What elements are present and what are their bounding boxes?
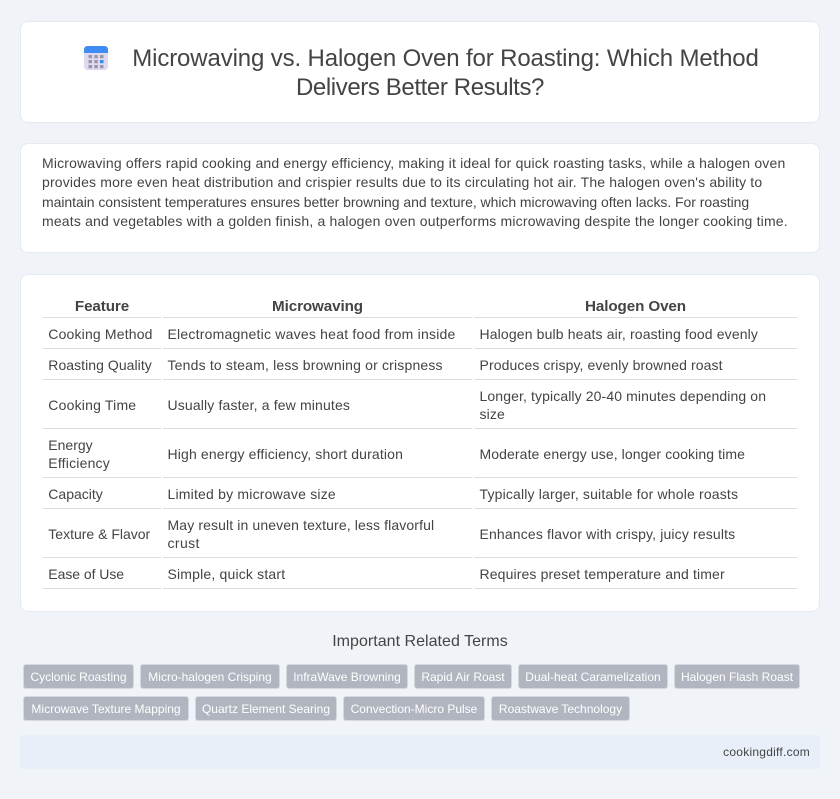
row: Energy Efficiency: High energy efficiency, short duration: [168, 446, 403, 462]
row: Roasting Quality: [43, 348, 797, 373]
row: Texture & Flavor: Enhances flavor with crispy, juicy results: [480, 526, 735, 542]
tag: Quartz Element Searing: [202, 702, 330, 716]
row: Capacity: Capacity: [48, 486, 103, 502]
panel: summary paragraph: [20, 143, 820, 253]
row: Cooking Method: Cooking Method: [48, 326, 153, 342]
row: Capacity: Limited by microwave size: [168, 486, 336, 502]
row: Cooking Time: size: [480, 406, 505, 422]
tag: Cyclonic Roasting: [30, 670, 127, 684]
row: Texture & Flavor: [43, 508, 797, 551]
row: Cooking Method: Electromagnetic waves heat food from inside: [168, 326, 456, 342]
row: Energy Efficiency: Efficiency: [48, 455, 110, 471]
table header: [75, 298, 686, 315]
row: Texture & Flavor: Texture & Flavor: [48, 526, 150, 542]
row: Cooking Time: Usually faster, a few minutes: [168, 397, 350, 413]
tag: Dual-heat Caramelization: [525, 670, 661, 684]
tag: Halogen Flash Roast: [681, 670, 793, 684]
table header: Halogen Oven: [585, 298, 686, 315]
footer source text: cookingdiff.com: [723, 745, 810, 759]
row: Cooking Method: Halogen bulb heats air, roasting food evenly: [480, 326, 758, 342]
tag: [674, 664, 800, 689]
row: Ease of Use: Simple, quick start: [168, 566, 285, 582]
row: Roasting Quality: Tends to steam, less browning or crispness: [168, 357, 443, 373]
tag: [23, 664, 134, 689]
text block: summary: Microwaving offers rapid cooking and energy efficiency, making it ideal for quick roasting tasks, while a halogen oven: [42, 155, 785, 171]
tag cloud: [23, 664, 800, 721]
heading: related terms: Important Related Terms: [332, 633, 508, 650]
row: Texture & Flavor: May result in uneven texture, less flavorful: [168, 517, 434, 533]
tag: [414, 664, 512, 689]
tag: [195, 696, 337, 721]
table header: Microwaving: [272, 298, 363, 315]
row: Energy Efficiency: [43, 428, 797, 471]
row: Roasting Quality: Produces crispy, evenly browned roast: [480, 357, 723, 373]
row: Cooking Time: Cooking Time: [48, 397, 136, 413]
table header: Feature: [75, 298, 129, 315]
row: Cooking Time: Longer, typically 20-40 minutes depending on: [480, 388, 766, 404]
row: Ease of Use: [43, 557, 797, 589]
row: Cooking Time: [43, 379, 797, 422]
row: Ease of Use: Requires preset temperature and timer: [480, 566, 725, 582]
tag: [23, 696, 189, 721]
tag: Rapid Air Roast: [421, 670, 505, 684]
tag: [286, 664, 408, 689]
tag: Convection-Micro Pulse: [351, 702, 477, 716]
panel: comparison table: [20, 274, 820, 612]
row: Capacity: [43, 477, 797, 502]
tag: Micro-halogen Crisping: [148, 670, 272, 684]
text block: summary: maintain consistent temperatures ensures better browning and texture, which microwaving often lacks. For roasting: [42, 194, 749, 210]
text block: summary: [42, 155, 788, 229]
text block: summary: meats and vegetables with a golden finish, a halogen oven outperforms microwaving despite the longer cooking time.: [42, 213, 788, 229]
footer: [20, 735, 820, 769]
title: Delivers Better Results?: [296, 74, 544, 101]
row: Texture & Flavor: crust: [168, 535, 200, 551]
title: Microwaving vs. Halogen Oven for Roasting: Which Method: [132, 45, 759, 72]
text block: summary: provides more even heat distribution and crispier results due to its circulating hot air. The halogen oven's ability to: [42, 174, 762, 190]
tag: Roastwave Technology: [499, 702, 622, 716]
panel: title header: [20, 21, 820, 123]
row: Energy Efficiency: Moderate energy use, longer cooking time: [480, 446, 745, 462]
tag: InfraWave Browning: [293, 670, 401, 684]
row: Capacity: Typically larger, suitable for whole roasts: [480, 486, 738, 502]
tag: [518, 664, 668, 689]
title: [132, 45, 759, 101]
row: Roasting Quality: Roasting Quality: [48, 357, 152, 373]
tag: [491, 696, 630, 721]
tag: [343, 696, 485, 721]
row: Ease of Use: Ease of Use: [48, 566, 124, 582]
tag: Microwave Texture Mapping: [31, 702, 181, 716]
row: Energy Efficiency: Energy: [48, 437, 93, 453]
tag: [140, 664, 280, 689]
icon: calendar: [84, 46, 108, 70]
row: Cooking Method: [43, 317, 797, 342]
